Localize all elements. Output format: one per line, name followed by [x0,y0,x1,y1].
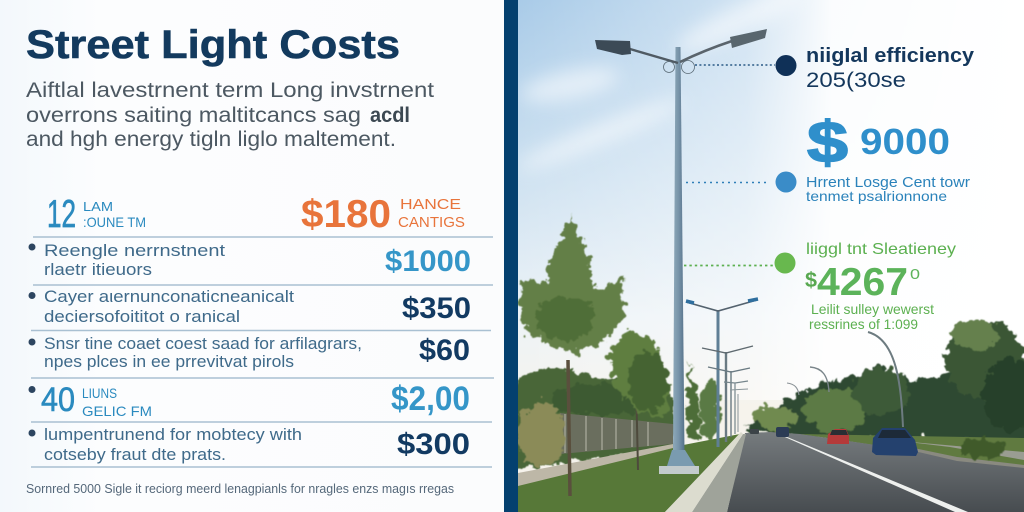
row: 12 lamps header: HANCE [400,196,461,213]
dotted leader: navy [695,64,775,66]
row: investment: $1000 [385,245,471,278]
callout: green savings: 0 [910,266,920,283]
panel: cost summary [0,0,518,512]
intro paragraph: and hgh energy tigln liglo maltement. [26,128,396,151]
title: Street Light Costs [26,23,400,67]
callout: blue cost: tenmet psalrionnone [806,188,947,204]
callout: blue cost [806,110,970,204]
row: replacement: $300 [397,428,470,461]
callout: blue cost: $ [807,110,848,175]
callout: efficiency: niigIal efficiency [806,45,975,67]
row: sensor: $60 [419,334,470,367]
shrub left [518,402,566,466]
far tree line left [512,368,674,470]
intro paragraph: Aiftlal lavestrnent term Long invstrnent [26,79,434,102]
row: replacement: lumpentrunend for mobtecy with [44,425,302,444]
right verge [800,434,1024,474]
intro paragraph: overrons saiting maltitcancs sag [26,104,361,127]
lane marking [778,434,968,512]
row: sensor: npes plces in ee prrevitvat pirols [44,352,294,371]
cars [750,427,918,456]
footnote: Sornred 5000 Sigle it reciorg meerd lenagpianls for nragles enzs magıs rregas [26,481,454,496]
row: 12 lamps header: 12 [47,193,76,236]
panel: street photograph [512,0,1024,512]
intro paragraph [26,79,434,151]
row: investment: Reengle nerrnstnent [44,241,225,260]
row: layer: $350 [402,292,471,325]
fence [560,413,673,454]
row: 40 lumens: LIUNS [82,385,117,401]
marker: blue dot [776,172,796,192]
row: 40 lumens: $2,00 [391,380,470,418]
callout: efficiency: 205(30se [806,69,906,92]
callout: green savings: liiggl tnt Sleatieney [806,241,956,258]
road surface [727,432,1024,512]
row: layer: Cayer aιernunconaticneanicalt [44,287,294,306]
roadside trees [520,216,720,496]
dotted leader: green [684,264,775,266]
footpath [518,444,673,486]
row: sensor [28,334,470,371]
row rules [31,237,494,467]
callout: blue cost: Hrrent Losge Cent towr [806,174,970,191]
row: 12 lamps header: :OUNE TM [83,214,146,230]
grass verge [518,434,740,512]
intro paragraph: acdl [370,104,410,127]
marker: green dot [774,252,796,274]
row: replacement: cotseby fraut dte prats. [44,445,226,464]
callout: green savings: Leilit sulley wewerst [811,301,934,317]
main street light [595,29,767,474]
row: investment [28,241,471,279]
row: 12 lamps header [47,193,465,236]
row: replacement [28,425,470,464]
marker: navy dot [776,55,796,76]
dotted leader: blue [686,182,770,184]
row: investment: rlaetr itieuors [44,260,152,279]
row: 40 lumens: 40 [41,381,75,419]
row: 40 lumens [28,380,470,419]
row: sensor: Snsr tine coaet coest saad for arfilagrars, [44,334,362,353]
callout: green savings: $ [805,269,817,292]
callout: efficiency [806,45,975,92]
row: 12 lamps header: $180 [301,193,391,236]
row: layer [28,287,471,326]
callout: blue cost: 9000 [860,121,950,162]
median curb and shrub [880,439,1024,468]
row: 12 lamps header: CANTIGS [398,214,465,231]
callout: green savings [805,241,956,332]
row: layer: deciersofoititot o ranical [44,307,240,326]
sidewalk and curb [692,434,746,512]
secondary street lights [686,299,903,447]
callout: green savings: ressrines of 1:099 [809,316,918,332]
row: 12 lamps header: LAM [83,199,113,214]
callout: green savings: 4267 [817,261,908,304]
row: 40 lumens: GELIC FM [82,403,152,419]
far tree line right [745,320,1024,442]
divider bar [504,0,518,512]
